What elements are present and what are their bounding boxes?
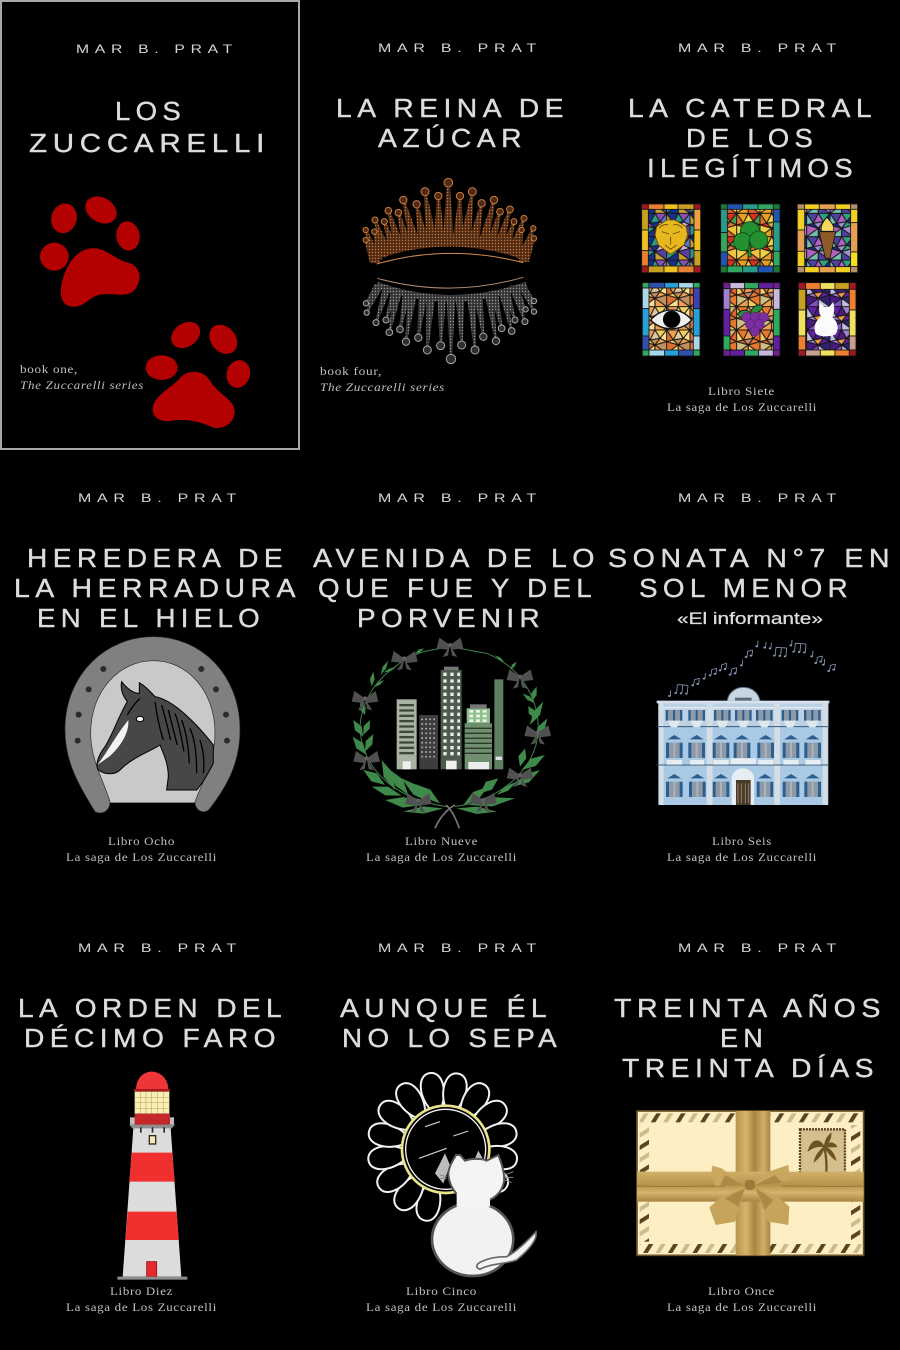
icon: clover window: [721, 204, 780, 273]
series caption: La saga de Los Zuccarelli: [366, 852, 517, 864]
title: DE LOS: [686, 123, 818, 153]
title: [614, 993, 886, 1083]
author: MAR B. PRAT: [78, 941, 242, 955]
author: MAR B. PRAT: [378, 41, 542, 55]
series caption: La saga de Los Zuccarelli: [66, 1302, 217, 1314]
title: LOS: [115, 96, 186, 126]
title: [628, 93, 877, 183]
icon: music notes and blue palace: [657, 640, 835, 805]
title: [29, 96, 270, 158]
series caption: La saga de Los Zuccarelli: [667, 852, 817, 864]
series caption: Libro Siete: [708, 386, 775, 398]
icon: laurel wreath with bows: [352, 638, 551, 828]
author: MAR B. PRAT: [678, 41, 842, 55]
series caption: Libro Once: [708, 1286, 775, 1298]
title: DÉCIMO FARO: [24, 1023, 281, 1053]
series caption: The Zuccarelli series: [320, 382, 445, 394]
panel: Los Zuccarelli: [1, 1, 299, 449]
flower petals: [367, 1071, 519, 1223]
series caption: [667, 836, 817, 864]
subtitle: «El informante»: [677, 609, 823, 628]
panel: La catedral de los ilegítimos: [628, 41, 877, 414]
white cat: [432, 1203, 513, 1276]
panel: Aunque él no lo sepa: [340, 941, 562, 1314]
panel: Sonata n°7 en sol menor: [608, 491, 895, 864]
reflected cat ears: [435, 1151, 483, 1183]
title: NO LO SEPA: [342, 1023, 562, 1053]
panel: Avenida de lo que fue y del porvenir: [313, 491, 600, 864]
icon: torch window: [797, 204, 858, 273]
bow: [709, 1165, 790, 1225]
series caption: book one,: [20, 364, 78, 376]
series caption: book four,: [320, 366, 382, 378]
title: SONATA N°7 EN: [608, 543, 895, 573]
series caption: La saga de Los Zuccarelli: [366, 1302, 517, 1314]
icon: gift envelope: [637, 1111, 864, 1255]
series caption: [366, 836, 517, 864]
series caption: Libro Cinco: [406, 1286, 477, 1298]
author: MAR B. PRAT: [678, 941, 842, 955]
series caption: [667, 386, 817, 414]
series caption: Libro Seis: [712, 836, 772, 848]
title: ZUCCARELLI: [29, 128, 270, 158]
title: ILEGÍTIMOS: [647, 153, 858, 183]
title: LA REINA DE: [336, 93, 569, 123]
series caption: [66, 1286, 217, 1314]
series caption: [66, 836, 217, 864]
title: PORVENIR: [357, 603, 545, 633]
icon: cat window: [798, 283, 856, 356]
title: TREINTA AÑOS: [614, 993, 886, 1023]
stained glass windows: [642, 204, 858, 356]
title: LA HERRADURA: [14, 573, 301, 603]
series caption: The Zuccarelli series: [20, 380, 144, 392]
title: [340, 993, 562, 1053]
title: QUE FUE Y DEL: [318, 573, 597, 603]
icon: eye window: [642, 283, 700, 356]
ribbon: [736, 1111, 770, 1255]
mirror: [402, 1106, 489, 1193]
author: MAR B. PRAT: [378, 941, 542, 955]
series caption: [667, 1286, 817, 1314]
series caption: Libro Ocho: [108, 836, 175, 848]
panel: Heredera de la herradura en el hielo: [14, 491, 301, 864]
title: LA ORDEN DEL: [18, 993, 287, 1023]
series caption: La saga de Los Zuccarelli: [667, 402, 817, 414]
title: [336, 93, 569, 153]
icon: grapes window: [723, 283, 780, 356]
icon: cat looking at flower mirror: [367, 1071, 536, 1276]
series caption: [20, 364, 144, 392]
author: MAR B. PRAT: [378, 491, 542, 505]
title: [14, 543, 301, 633]
title: EN: [720, 1023, 768, 1053]
series caption: La saga de Los Zuccarelli: [66, 852, 217, 864]
panel: La orden del décimo faro: [18, 941, 287, 1314]
icon: copper tiara: [363, 178, 537, 264]
icon: lighthouse: [117, 1072, 187, 1280]
title: [313, 543, 600, 633]
title: LA CATEDRAL: [628, 93, 877, 123]
panel: La reina de azúcar: [320, 41, 569, 394]
title: AZÚCAR: [378, 123, 527, 153]
series caption: La saga de Los Zuccarelli: [667, 1302, 817, 1314]
author: MAR B. PRAT: [678, 491, 842, 505]
series caption: Libro Nueve: [405, 836, 478, 848]
series caption: Libro Diez: [110, 1286, 173, 1298]
icon: horse in horseshoe: [65, 637, 240, 813]
icon: silver necklace: [363, 277, 537, 364]
music notes: [668, 640, 835, 697]
city buildings: [397, 667, 503, 769]
title: AUNQUE ÉL: [340, 993, 552, 1023]
icon: lion window: [642, 204, 701, 273]
icon: red paw prints: [40, 191, 253, 428]
series caption: [366, 1286, 517, 1314]
series caption: [320, 366, 445, 394]
title: HEREDERA DE: [27, 543, 288, 573]
postage stamp: [800, 1129, 845, 1177]
title: [18, 993, 287, 1053]
author: MAR B. PRAT: [76, 42, 238, 56]
panel: Treinta años en treinta días: [614, 941, 886, 1314]
title: TREINTA DÍAS: [622, 1053, 879, 1083]
title: [608, 543, 895, 603]
title: AVENIDA DE LO: [313, 543, 600, 573]
author: MAR B. PRAT: [78, 491, 242, 505]
title: SOL MENOR: [639, 573, 853, 603]
palace: [657, 687, 829, 805]
title: EN EL HIELO: [37, 603, 265, 633]
